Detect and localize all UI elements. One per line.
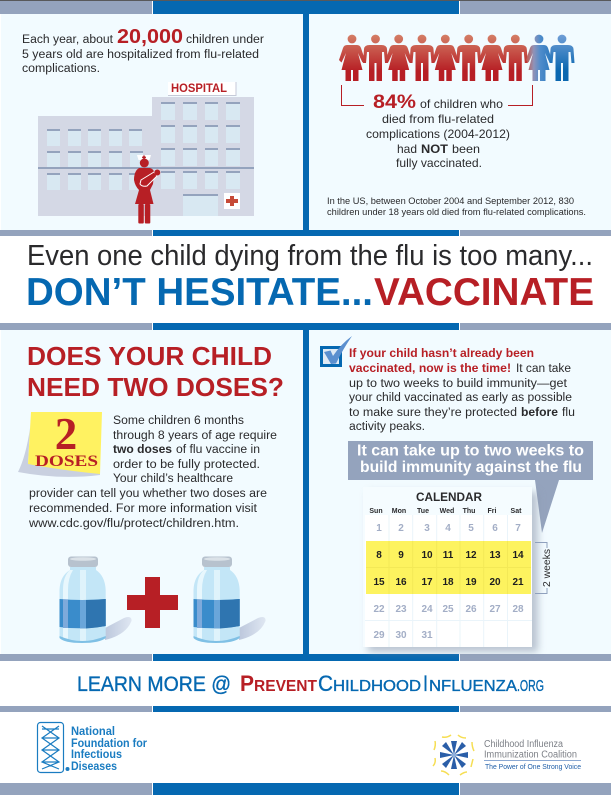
text: 84% of children (366, 91, 510, 170)
text: two doses explanation: Your child’s healthcare (113, 473, 233, 485)
text: 84% of children: been (452, 142, 480, 156)
calendar: 25 (442, 604, 454, 615)
calendar: 4 (445, 523, 451, 534)
calendar: 28 (512, 604, 524, 615)
text: 20,000 children hospitalized: 20,000 (117, 26, 183, 48)
calendar: 16 (395, 577, 407, 588)
calendar: 9 (398, 550, 404, 561)
calendar: 10 (421, 550, 433, 561)
calendar: 31 (421, 630, 433, 641)
text: 20,000 children hospitalized: 5 years old are hospitalized from flu-related (22, 49, 259, 61)
text: two doses explanation: order to be fully protected. (113, 459, 260, 471)
calendar: 1 (376, 523, 382, 534)
text: 20,000 children hospitalized: Each year, about (22, 34, 114, 46)
top section background panels (1, 14, 611, 230)
logo: Childhood Influenza Immunization Coalition (433, 735, 581, 775)
text: 84% of children: complications (2004-2012) (366, 127, 510, 141)
callout: two weeks to build immunity: It can take up to two weeks to (357, 442, 584, 460)
hospital illustration: HOSPITAL (171, 83, 227, 95)
logo: National Foundation for Infectious Diseases: Foundation for (71, 736, 147, 750)
text: two doses explanation: of flu vaccine in (176, 444, 260, 456)
text: vaccinate now: flu (562, 407, 575, 419)
text: two doses explanation: Some children 6 months (113, 415, 244, 427)
calendar: 14 (512, 550, 524, 561)
heading: two doses: DOES YOUR CHILD (27, 341, 272, 371)
text: 84% of children: 84% (373, 91, 416, 113)
banner headline (26, 240, 594, 314)
learn more link line: I (423, 671, 428, 696)
text: vaccinate now: It can take (516, 363, 571, 375)
calendar: Sat (511, 508, 522, 515)
callout: two weeks to build immunity: build immunity against the flu (360, 459, 582, 476)
icon: vaccine vial left (60, 556, 132, 643)
heading: two doses (27, 341, 284, 402)
text: US statistic footnote: In the US, between October 2004 and September 2012, 830 (327, 196, 574, 206)
calendar: 17 (421, 577, 433, 588)
text: 20,000 children hospitalized: complications. (22, 63, 100, 75)
banner headline: Even one child dying from the flu is too many... (27, 240, 593, 272)
text: 20,000 children hospitalized: children under (186, 34, 264, 46)
calendar: 26 (465, 604, 477, 615)
learn more link line: C (318, 671, 333, 696)
text: vaccinate now: vaccinated, now is the time! (349, 363, 511, 375)
learn more link line (77, 671, 544, 696)
calendar: Thu (463, 508, 475, 515)
icon: sticky note 2 doses (18, 409, 102, 477)
text: vaccinate now (349, 348, 575, 433)
text: vaccinate now: activity peaks. (349, 421, 425, 433)
learn more link line: NFLUENZA (429, 678, 518, 695)
icon: sticky note 2 doses: DOSES (35, 453, 98, 470)
learn more link line: P (240, 671, 254, 696)
bracket: 2 weeks: 2 weeks (542, 549, 553, 587)
calendar: 29 (373, 630, 385, 641)
text: vaccinate now: your child vaccinated as early as possible (349, 392, 572, 404)
calendar: 15 (373, 577, 385, 588)
icon: red plus (127, 577, 178, 628)
calendar: 12 (465, 550, 477, 561)
bracket under red figures (342, 85, 532, 106)
calendar: 11 (443, 550, 454, 561)
text: US statistic footnote: children under 18 years old died from flu-related complications. (327, 207, 586, 217)
text: vaccinate now: to make sure they’re protected (349, 407, 517, 419)
text: 84% of children: died from flu-related (382, 112, 494, 126)
text: 84% of children: had (397, 142, 417, 156)
text: two doses explanation (28, 415, 277, 530)
calendar: Fri (488, 508, 497, 515)
heading: two doses: NEED TWO DOSES? (27, 372, 284, 402)
banner headline: VACCINATE (374, 271, 594, 314)
text: vaccinate now: If your child hasn’t already been (349, 348, 534, 360)
icon: vaccine vial right (194, 556, 266, 643)
calendar: 13 (489, 550, 501, 561)
text: 84% of children: fully vaccinated. (396, 156, 482, 170)
calendar: Sun (369, 508, 383, 515)
calendar: Wed (440, 508, 454, 515)
calendar: 8 (376, 550, 382, 561)
calendar: 2 (398, 523, 404, 534)
text: two doses explanation: through 8 years of age require (113, 430, 277, 442)
learn more link line: REVENT (254, 678, 318, 695)
text: two doses explanation: two doses (113, 444, 172, 456)
callout: two weeks to build immunity (348, 441, 593, 533)
logo: Childhood Influenza Immunization Coalition: The Power of One Strong Voice (485, 764, 581, 771)
calendar: 3 (424, 523, 430, 534)
logo: National Foundation for Infectious Diseases: Diseases (71, 759, 117, 773)
text: two doses explanation: recommended. For more information visit (29, 503, 258, 515)
logo: National Foundation for Infectious Diseases (38, 722, 147, 773)
text: two doses explanation: provider can tell you whether two doses are (29, 488, 267, 500)
text: vaccinate now: before (521, 407, 558, 419)
text: US statistic footnote (327, 196, 586, 217)
text: vaccinate now: up to two weeks to build immunity—get (349, 378, 568, 390)
logo: Childhood Influenza Immunization Coalition: Childhood Influenza (484, 739, 563, 750)
icon: check box (320, 336, 352, 367)
calendar: 30 (395, 630, 407, 641)
calendar: Tue (417, 508, 429, 515)
calendar: CALENDAR (416, 490, 482, 504)
banner headline: DON’T HESITATE... (26, 271, 373, 314)
calendar (363, 487, 538, 652)
calendar: 19 (465, 577, 477, 588)
logo: Childhood Influenza Immunization Coalition: Immunization Coalition (484, 750, 577, 760)
learn more link line: HILDHOOD (333, 678, 421, 695)
icon: nurse holding baby (134, 155, 160, 224)
learn more link line: .ORG (517, 678, 544, 695)
calendar: 22 (373, 604, 385, 615)
calendar: 7 (515, 523, 521, 534)
lower section background panels (1, 330, 611, 654)
calendar: 24 (421, 604, 433, 615)
calendar: Mon (392, 508, 406, 515)
calendar: 23 (395, 604, 407, 615)
text: 20,000 children hospitalized (22, 26, 264, 75)
bracket: 2 weeks (535, 542, 553, 594)
icon: sticky note 2 doses: 2 (55, 409, 77, 459)
calendar: 27 (489, 604, 501, 615)
text: two doses explanation: www.cdc.gov/flu/protect/children.htm. (28, 518, 239, 530)
learn more link line: LEARN MORE @ (77, 673, 231, 696)
logo: National Foundation for Infectious Diseases: National (71, 724, 115, 738)
calendar: 18 (442, 577, 454, 588)
hospital illustration (38, 82, 254, 216)
logo: National Foundation for Infectious Diseases: Infectious (71, 747, 122, 761)
calendar: 5 (468, 523, 474, 534)
calendar: 21 (512, 577, 524, 588)
text: 84% of children: NOT (421, 142, 449, 156)
text: 84% of children: of children who (420, 97, 503, 111)
calendar: 20 (489, 577, 501, 588)
pictogram: ten linked children (339, 35, 574, 81)
calendar: 6 (492, 523, 498, 534)
